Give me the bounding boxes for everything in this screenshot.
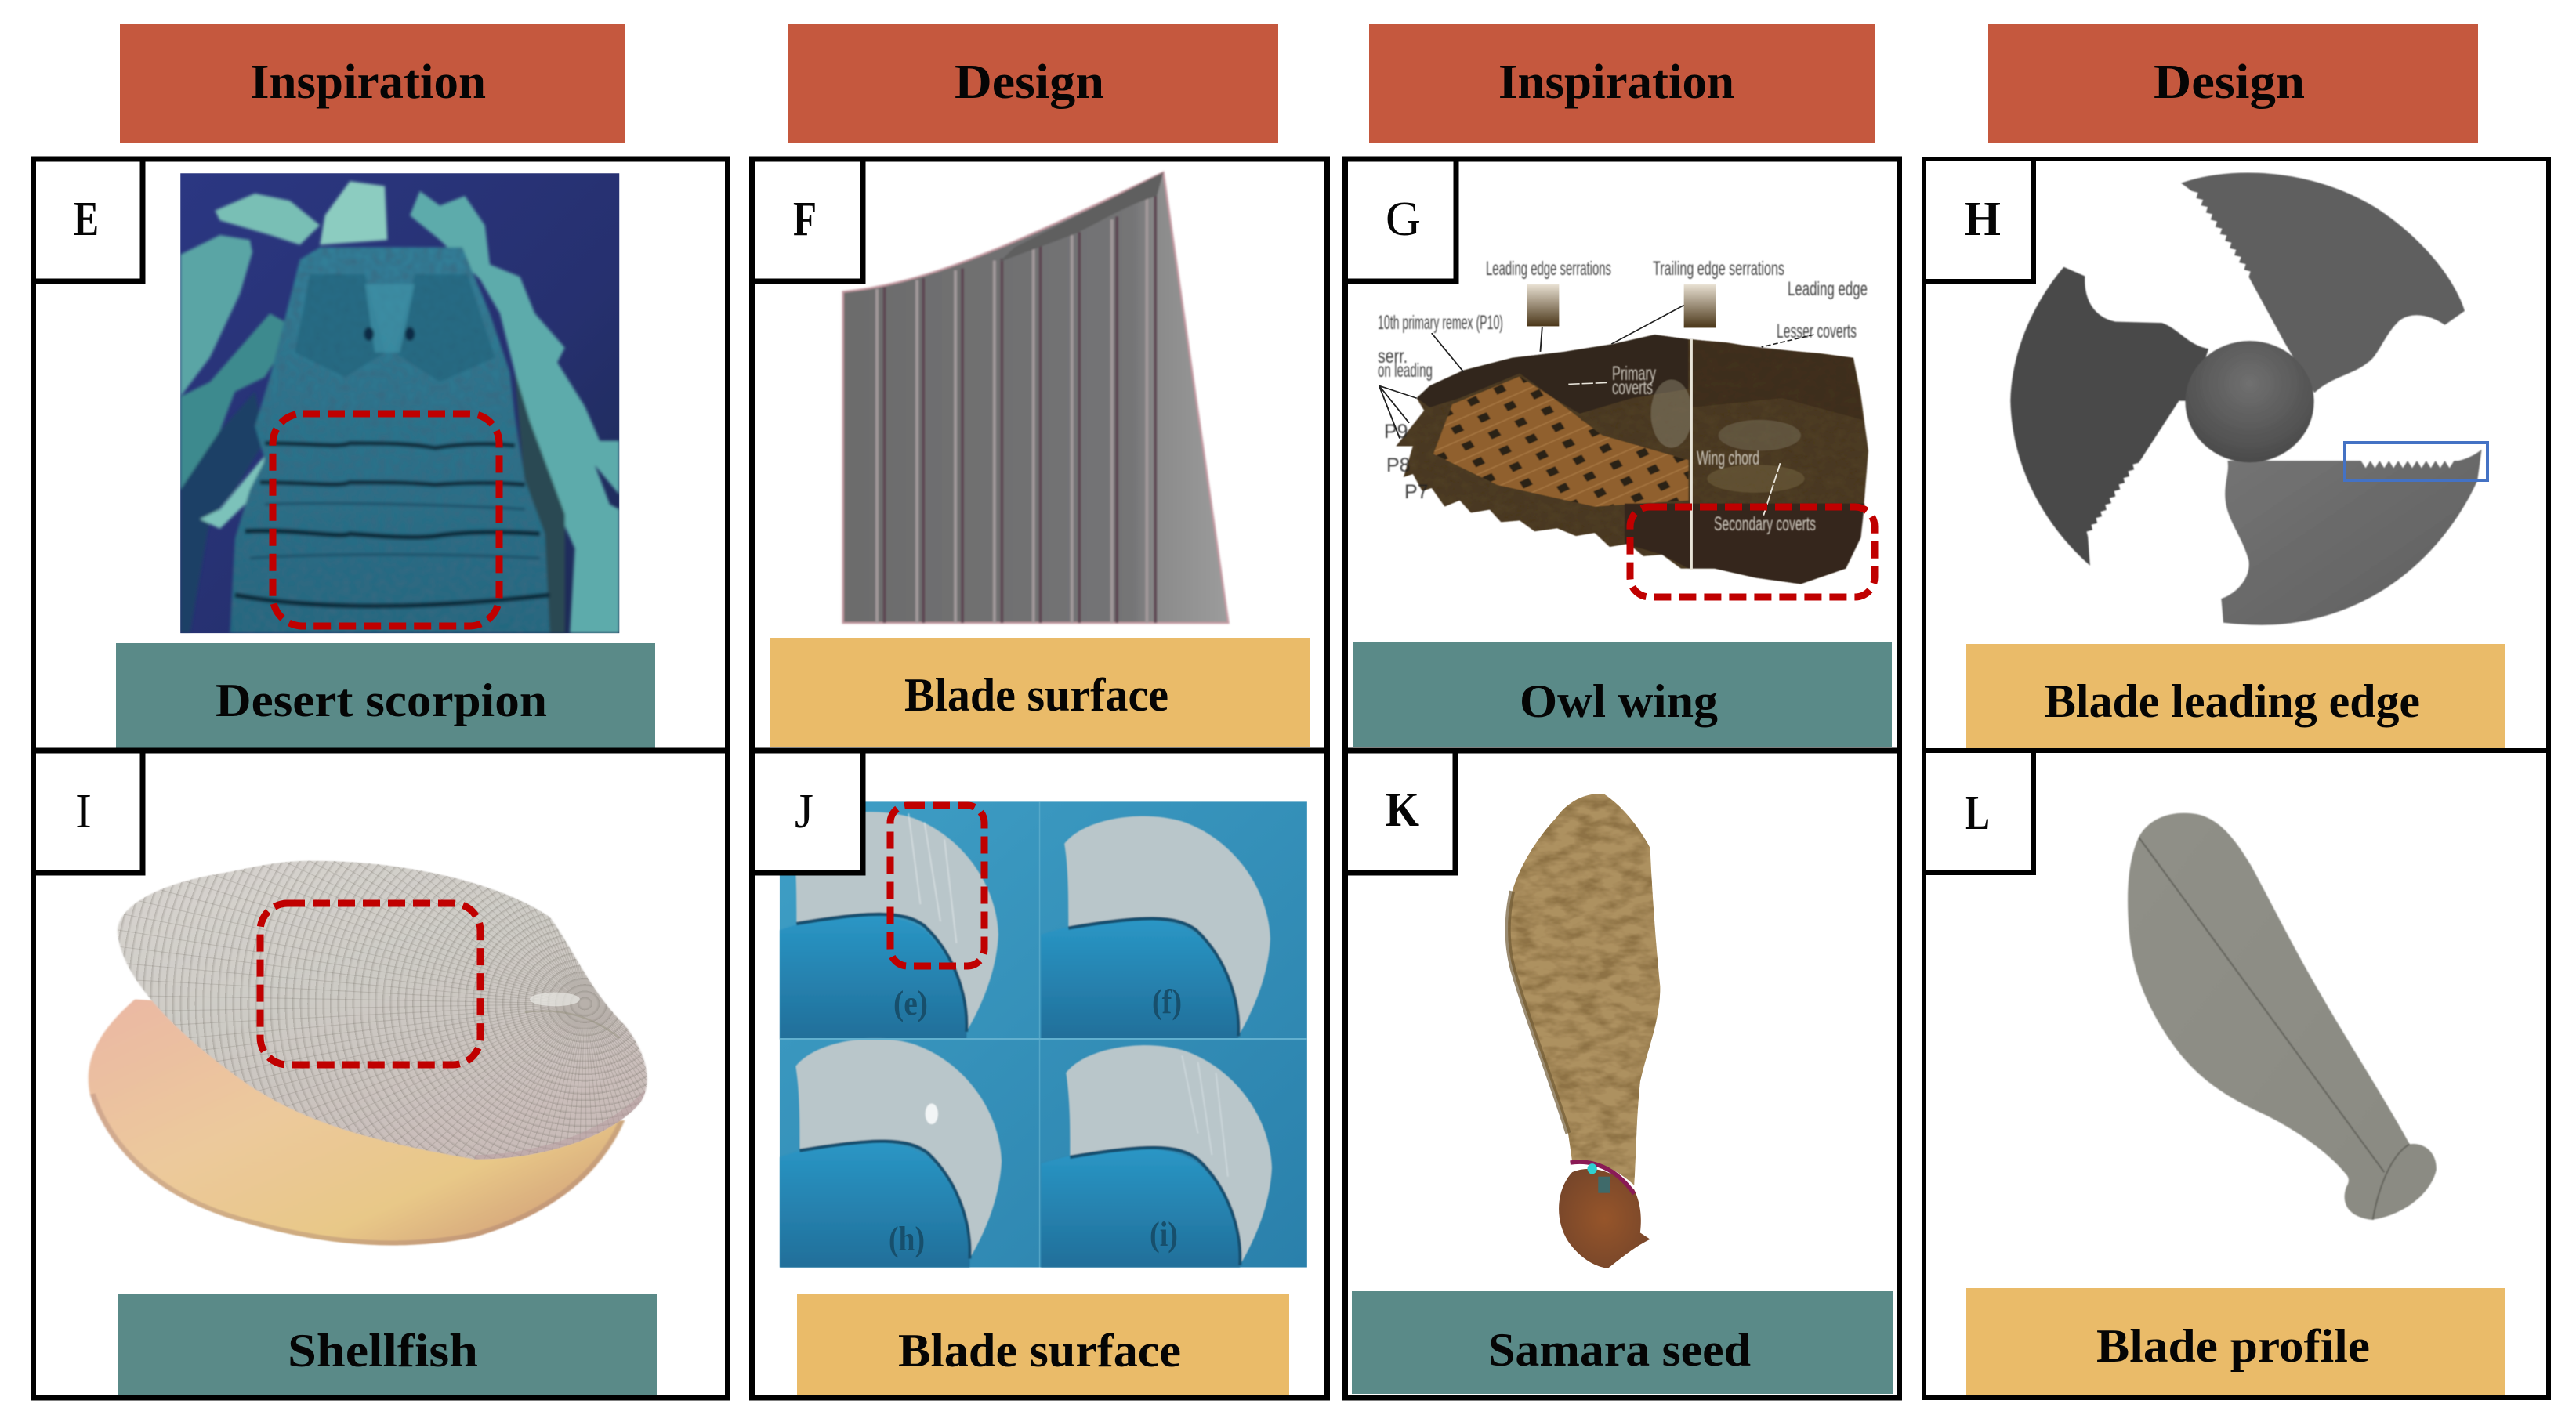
panel I: shellfish (31, 754, 730, 1401)
photo: clam shell (87, 860, 648, 1246)
blade h (780, 1039, 1002, 1268)
label box E: E (74, 193, 99, 246)
wing annotations: Wing chord (1697, 447, 1759, 469)
photo: samara seed (1508, 794, 1660, 1268)
label box G: G (1386, 193, 1421, 246)
sub-figure labels: (f) (1152, 982, 1182, 1021)
label box L (1924, 751, 2034, 873)
label box K (1345, 751, 1455, 873)
wing annotations: P9 (1384, 421, 1408, 443)
panel E: desert scorpion (33, 159, 727, 751)
wing annotations: Primary (1612, 363, 1656, 385)
wing annotations: Trailing edge serrations (1653, 258, 1784, 280)
label box H: H (1964, 193, 2001, 246)
highlight box (260, 903, 480, 1065)
wing annotations: on leading (1378, 360, 1433, 382)
photo: annotated owl wing (1379, 284, 1868, 584)
heading: Inspiration (column 1) (120, 24, 625, 143)
caption: Desert scorpion: Desert scorpion (216, 675, 547, 726)
caption: Blade surface: Blade surface (898, 1325, 1181, 1377)
panel K: samara seed (1345, 751, 1900, 1398)
label box F: F (793, 193, 817, 246)
highlight box (890, 805, 984, 966)
wing annotations: coverts (1612, 377, 1653, 399)
blade e (780, 812, 998, 1039)
label box I: I (75, 785, 92, 838)
caption: Shellfish: Shellfish (288, 1325, 478, 1377)
label box L: L (1965, 787, 1990, 840)
blade f (1042, 816, 1270, 1039)
wing annotations: Lesser coverts (1777, 320, 1857, 342)
label box G (1345, 159, 1456, 281)
heading: Design (column 4) (1988, 24, 2478, 143)
wing annotations: P7 (1404, 481, 1429, 503)
highlight box (273, 414, 499, 626)
serration thumbnails (1527, 284, 1716, 327)
label box J: J (795, 785, 813, 838)
blade i (1042, 1045, 1272, 1268)
fan blade: left (2010, 267, 2208, 566)
samara wing (1508, 794, 1660, 1185)
heading: Design (column 2): Design (955, 56, 1104, 109)
fan blade: top right (2181, 173, 2465, 393)
wing annotations: 10th primary remex (P10) (1378, 312, 1503, 334)
caption: Blade profile (1966, 1288, 2505, 1395)
panel H: blade leading edge (1924, 159, 2549, 751)
blue detail box (2345, 443, 2487, 480)
render: serrated three-blade fan (2010, 173, 2482, 625)
sub-figure labels: (h) (889, 1220, 925, 1258)
heading: Design (column 4): Design (2154, 56, 2305, 109)
panel F: blade surface (752, 159, 1328, 751)
sub-figure labels: (e) (893, 984, 928, 1022)
sub-figure labels (889, 982, 1182, 1258)
label box J (752, 751, 863, 873)
wing annotations: Leading edge (1788, 278, 1868, 300)
caption: Samara seed: Samara seed (1488, 1324, 1751, 1376)
caption: Shellfish (118, 1294, 657, 1395)
photo: desert scorpion (180, 173, 619, 633)
panel L: blade profile (1924, 751, 2549, 1398)
label box E (33, 159, 143, 281)
wing annotations: Leading edge serrations (1486, 258, 1611, 280)
samara nut (1559, 1169, 1650, 1268)
wing annotations: serr. (1378, 346, 1408, 367)
caption: Desert scorpion (116, 643, 655, 749)
photo grid: four printed blades (780, 801, 1307, 1268)
caption: Samara seed (1352, 1291, 1893, 1394)
label box K: K (1386, 783, 1419, 837)
label box F (752, 159, 863, 281)
fan blade: bottom right (2221, 450, 2482, 625)
label box I (33, 751, 143, 873)
caption: Owl wing (1353, 642, 1892, 747)
heading: Inspiration (column 3): Inspiration (1498, 56, 1734, 109)
wing annotations: P8 (1386, 454, 1411, 476)
caption: Blade profile: Blade profile (2096, 1320, 2370, 1372)
highlight box (1630, 507, 1875, 597)
label box H (1924, 159, 2034, 281)
caption: Blade surface: Blade surface (904, 669, 1168, 721)
heading: Inspiration (column 3) (1369, 24, 1875, 143)
heading: Design (column 2) (788, 24, 1278, 143)
caption: Blade surface (797, 1294, 1289, 1395)
wing annotations (1378, 258, 1868, 535)
render: ribbed blade surface (843, 172, 1228, 623)
render: paddle blade profile (2128, 813, 2437, 1220)
sub-figure labels: (i) (1150, 1215, 1178, 1254)
wing annotations: Secondary coverts (1714, 513, 1816, 535)
caption: Owl wing: Owl wing (1520, 675, 1718, 727)
caption: Blade leading edge: Blade leading edge (2045, 675, 2420, 727)
white scale line (1689, 339, 1694, 570)
panel G: owl wing (1345, 159, 1900, 751)
heading: Inspiration (column 1): Inspiration (250, 56, 486, 109)
caption: Blade leading edge (1966, 644, 2505, 751)
caption: Blade surface (770, 638, 1310, 747)
fan hub (2185, 341, 2314, 462)
panel J: blade surface photos (752, 751, 1328, 1398)
